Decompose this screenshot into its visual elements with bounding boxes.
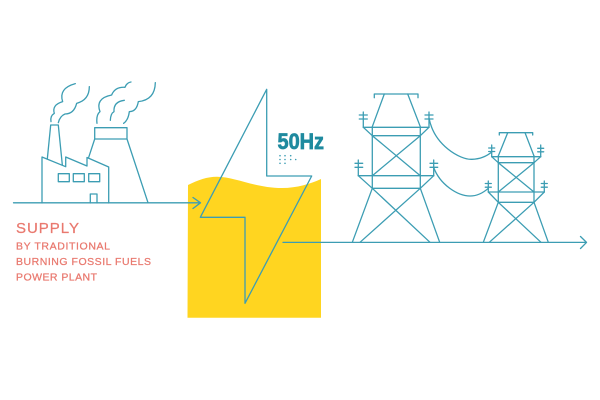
lightning bolt [200,89,312,303]
50Hz label: 50Hz [278,129,324,154]
smoke plumes [51,82,155,123]
output arrow [283,236,586,248]
cooling tower [89,128,148,203]
heading: supply: SUPPLY [16,220,79,237]
factory windows [58,174,100,182]
yellow wave block [188,177,321,318]
factory building [42,157,109,203]
caption lines: BY TRADITIONAL [16,240,110,252]
caption lines: BURNING FOSSIL FUELS [16,256,151,268]
caption lines: POWER PLANT [16,272,98,284]
power cables [429,118,492,196]
factory chimney [47,125,62,165]
factory with cooling tower and smoke [42,82,155,203]
caption lines [16,240,151,284]
factory door [90,194,97,203]
small pylon [483,133,548,242]
input arrow [14,198,200,208]
supply caption [16,220,151,284]
large pylon [352,94,440,242]
frequency dots [279,155,297,164]
